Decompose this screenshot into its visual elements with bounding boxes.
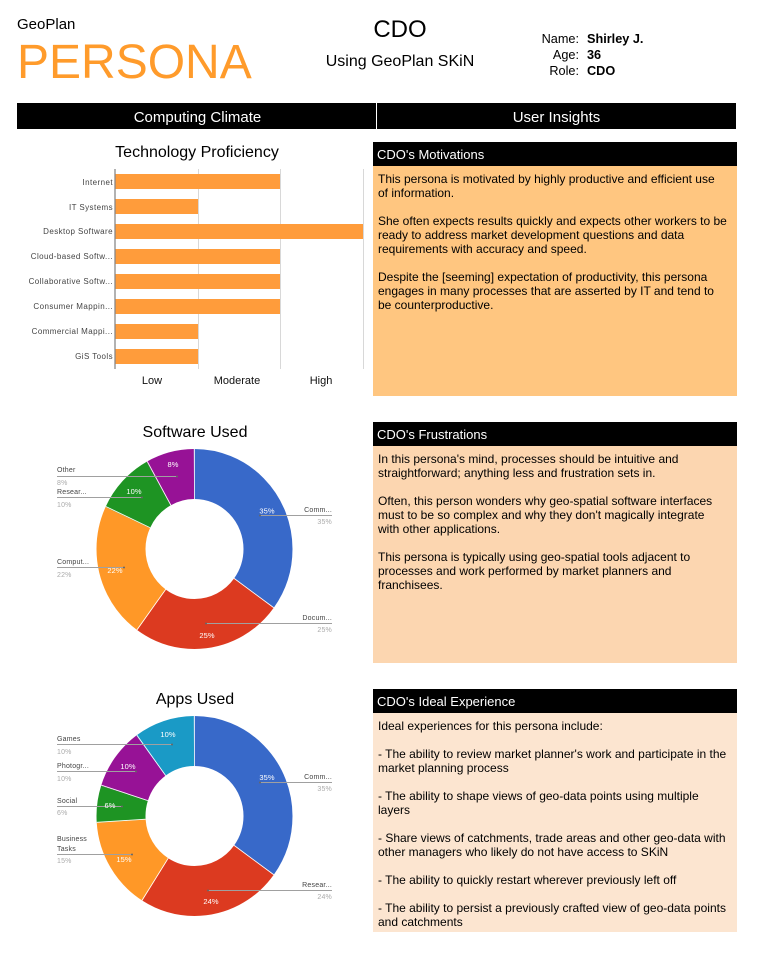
donut chart: software used: Comm... (304, 507, 332, 514)
panel: ideal experience: - The ability to shape views of geo-data points using multiple (378, 789, 699, 803)
bar chart: technology proficiency: High (310, 375, 332, 387)
bar chart: technology proficiency: Internet (82, 178, 113, 187)
panel: ideal experience: layers (378, 803, 410, 817)
donut chart: apps used: 10% (57, 776, 72, 783)
donut chart: apps used: 6% (104, 801, 116, 810)
donut chart: apps used: 35% (317, 786, 332, 793)
panel: ideal experience: - Share views of catchments, trade areas and other geo-data with (378, 831, 726, 845)
panel: frustrations: must to be so complex and why they don't magically integrate (378, 508, 704, 522)
donut chart: software used: Docum... (302, 615, 332, 622)
heading: ideal experience: CDO's Ideal Experience (377, 694, 515, 709)
bar chart: technology proficiency: Desktop Software (43, 227, 113, 236)
panel: ideal experience (373, 713, 737, 932)
bar chart: technology proficiency: Cloud-based Softw... (31, 252, 113, 261)
persona details: Age: (553, 48, 579, 62)
persona details: 36 (587, 48, 601, 62)
section header: user insights: User Insights (513, 109, 600, 126)
bar chart: technology proficiency (29, 144, 364, 387)
section header: computing climate: Computing Climate (134, 109, 261, 126)
panel: motivations: be counterproductive. (378, 298, 493, 312)
donut chart: apps used: 24% (203, 897, 219, 906)
panel: frustrations: processes and work performed by market planners and (378, 564, 671, 578)
section header: computing climate (17, 103, 376, 129)
donut chart: software used: 8% (57, 480, 68, 487)
panel: frustrations: with other applications. (378, 522, 500, 536)
donut chart: apps used: 10% (57, 749, 72, 756)
donut chart: apps used: Social (57, 798, 78, 805)
bar chart: technology proficiency: Consumer Mappin... (33, 302, 113, 311)
donut chart: software used: Comput... (57, 559, 89, 566)
heading: motivations (373, 142, 737, 166)
panel: ideal experience: - The ability to persist a previously crafted view of geo-data points (378, 901, 726, 915)
panel: frustrations: franchisees. (378, 578, 443, 592)
bar chart: technology proficiency: Commercial Mappi... (32, 327, 113, 336)
donut chart: apps used: Tasks (57, 846, 76, 853)
panel: ideal experience: - The ability to review market planner's work and participate in the (378, 747, 726, 761)
donut chart: apps used: 10% (160, 730, 176, 739)
panel: motivations: engages in many processes that are asserted by IT and tend to (378, 284, 714, 298)
heading: ideal experience (373, 689, 737, 713)
bar chart: technology proficiency: Technology Proficiency (115, 144, 279, 161)
panel: ideal experience: and catchments (378, 915, 463, 929)
bar chart: technology proficiency: IT Systems (69, 203, 113, 212)
panel: ideal experience: other managers who likely do not have access to SKiN (378, 845, 668, 859)
bar chart: technology proficiency: GiS Tools (75, 352, 113, 361)
panel: motivations (373, 166, 737, 396)
persona details: Shirley J. (587, 32, 643, 46)
donut chart: apps used: 35% (259, 773, 275, 782)
donut chart: apps used: Apps Used (156, 691, 234, 708)
donut chart: apps used: Comm... (304, 774, 332, 781)
persona details: CDO (587, 64, 615, 78)
donut chart: apps used: 10% (120, 762, 136, 771)
donut chart: software used: Software Used (143, 424, 247, 441)
donut chart: software used: 10% (126, 487, 142, 496)
donut chart: software used: 22% (57, 572, 72, 579)
panel: motivations: of information. (378, 186, 454, 200)
donut chart: apps used: Business (57, 836, 87, 843)
donut chart: software used: 35% (259, 506, 275, 516)
donut chart: software used: Other (57, 467, 76, 474)
donut chart: apps used (57, 691, 332, 906)
panel: frustrations: This persona is typically using geo-spatial tools adjacent to (378, 550, 690, 564)
panel: frustrations: Often, this person wonders why geo-spatial software interfaces (378, 494, 712, 508)
section header: user insights (377, 103, 736, 129)
persona details (542, 32, 643, 78)
donut chart: software used: 35% (317, 519, 332, 526)
donut chart: apps used: 6% (57, 810, 68, 817)
donut chart: apps used: Photogr... (57, 763, 89, 770)
subtitle: Using GeoPlan SKiN (326, 53, 474, 70)
donut chart: apps used: 15% (116, 855, 132, 864)
bar chart: technology proficiency: Collaborative Softw... (29, 277, 113, 286)
panel: ideal experience: Ideal experiences for this persona include: (378, 719, 603, 733)
title: persona: PERSONA (17, 36, 252, 89)
donut chart: software used: 25% (317, 627, 332, 634)
persona details: Name: (542, 32, 579, 46)
donut chart: software used (57, 424, 332, 640)
panel: frustrations: straightforward; anything less and frustration sets in. (378, 466, 655, 480)
heading: frustrations: CDO's Frustrations (377, 427, 487, 442)
donut chart: software used: Resear... (57, 489, 87, 496)
persona details: Role: (549, 64, 579, 78)
heading: frustrations (373, 422, 737, 446)
heading: motivations: CDO's Motivations (377, 147, 484, 162)
panel: motivations: She often expects results quickly and expects other workers to be (378, 214, 727, 228)
donut chart: apps used: 24% (317, 894, 332, 901)
bar chart: technology proficiency: Moderate (214, 375, 260, 387)
panel: frustrations: In this persona's mind, processes should be intuitive and (378, 452, 678, 466)
panel: ideal experience: - The ability to quickly restart wherever previously left off (378, 873, 676, 887)
panel: motivations: ready to address market development questions and data (378, 228, 684, 242)
donut chart: apps used: 15% (57, 858, 72, 865)
panel: frustrations (373, 446, 737, 663)
panel: ideal experience: market planning process (378, 761, 509, 775)
panel: motivations: requirements with accuracy and speed. (378, 242, 587, 256)
donut chart: software used: 8% (167, 460, 179, 469)
panel: motivations: This persona is motivated by highly productive and efficient use (378, 172, 715, 186)
donut chart: software used: 10% (57, 502, 72, 509)
brand name: GeoPlan (17, 16, 75, 33)
donut chart: software used: 25% (199, 631, 215, 640)
bar chart: technology proficiency: Low (142, 375, 162, 387)
donut chart: apps used: Resear... (302, 882, 332, 889)
donut chart: software used: 22% (107, 566, 123, 575)
donut chart: apps used: Games (57, 736, 81, 743)
panel: motivations: Despite the [seeming] expectation of productivity, this persona (378, 270, 707, 284)
role heading: CDO (373, 16, 427, 43)
